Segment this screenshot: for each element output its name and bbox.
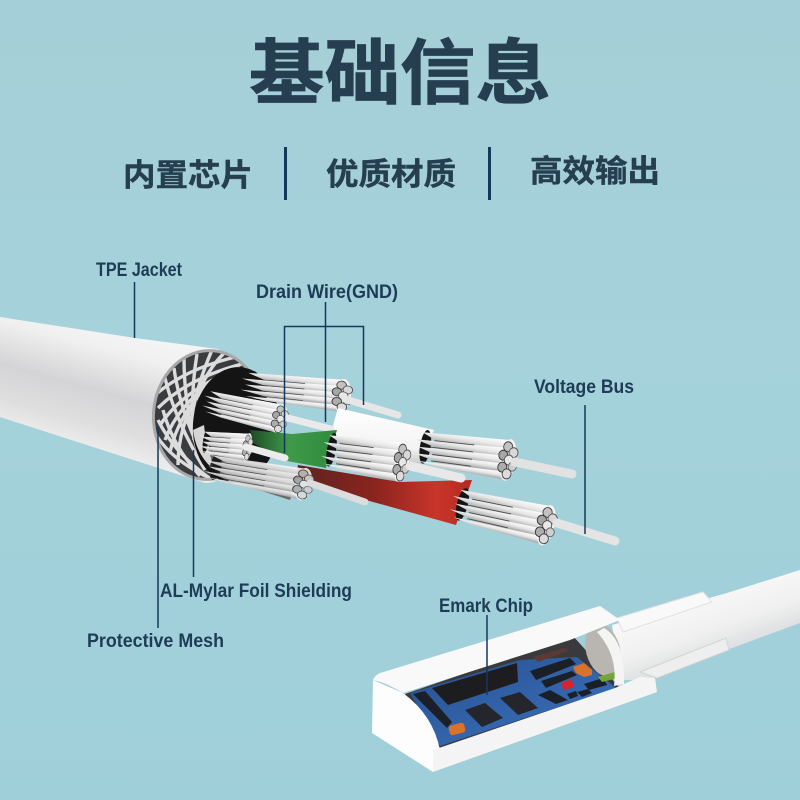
small board components (413, 648, 607, 728)
bottom dark conductor (201, 449, 316, 502)
label: TPE Jacket: TPE Jacket (96, 260, 183, 281)
housing left end (372, 680, 440, 772)
red insulated wire (296, 465, 472, 525)
green insulated wire (250, 430, 337, 468)
red component (561, 679, 574, 690)
lower flange (640, 638, 729, 678)
divider two (488, 147, 491, 200)
feature: built-in chip: 内置芯片 (123, 158, 253, 193)
white wire bare pin (515, 462, 572, 474)
label: TPE Jacket (96, 260, 183, 338)
circuit board (410, 657, 616, 746)
green wire pin (410, 466, 461, 478)
protective mesh ring (152, 349, 277, 483)
foil layer rim (193, 425, 252, 483)
connector illustration (372, 570, 800, 772)
flash chip two (500, 692, 538, 715)
flash chip one (465, 703, 503, 727)
upper left conductor (200, 385, 291, 435)
orange capacitors right (573, 663, 592, 677)
label: AL-Mylar Foil Shielding: AL-Mylar Foil Shielding (160, 581, 352, 602)
cut cable end (580, 620, 626, 680)
divider one (284, 147, 287, 200)
back bare pin (345, 399, 398, 415)
housing interior (405, 636, 620, 748)
bottom pin (310, 483, 365, 502)
back silver conductor (239, 367, 354, 414)
upper flange (617, 592, 712, 632)
red wire conductor (447, 482, 561, 548)
feature: quality material: 优质材质 (326, 157, 456, 192)
housing bottom lip (433, 677, 657, 772)
label: Voltage Bus: Voltage Bus (534, 377, 634, 398)
cable end ring (597, 628, 624, 686)
lower left pin (246, 447, 285, 458)
title: 基础信息 (249, 35, 551, 114)
orange capacitor left (448, 722, 466, 736)
connector cable body (612, 570, 800, 680)
label: Emark Chip: Emark Chip (439, 596, 533, 617)
cable cross-section illustration (0, 317, 615, 548)
upper left pin (288, 418, 331, 429)
black connector block (432, 663, 518, 705)
label: Drain Wire (GND) with bracket: Drain Wire(GND) (256, 282, 398, 303)
label: Protective Mesh: Protective Mesh (87, 631, 224, 652)
TPE jacket (0, 317, 238, 483)
white wire conductor (411, 424, 520, 482)
red wire bare pin (557, 523, 615, 541)
lower left short conductor (198, 426, 254, 462)
white insulated wire (330, 408, 434, 466)
housing top face (373, 606, 620, 693)
label: Drain Wire (GND) with bracket (256, 282, 398, 453)
green wire conductor (319, 428, 413, 484)
label: Emark Chip (439, 596, 533, 695)
bottom foil strands shadow (210, 455, 300, 500)
feature: efficient output: 高效输出 (530, 154, 660, 189)
